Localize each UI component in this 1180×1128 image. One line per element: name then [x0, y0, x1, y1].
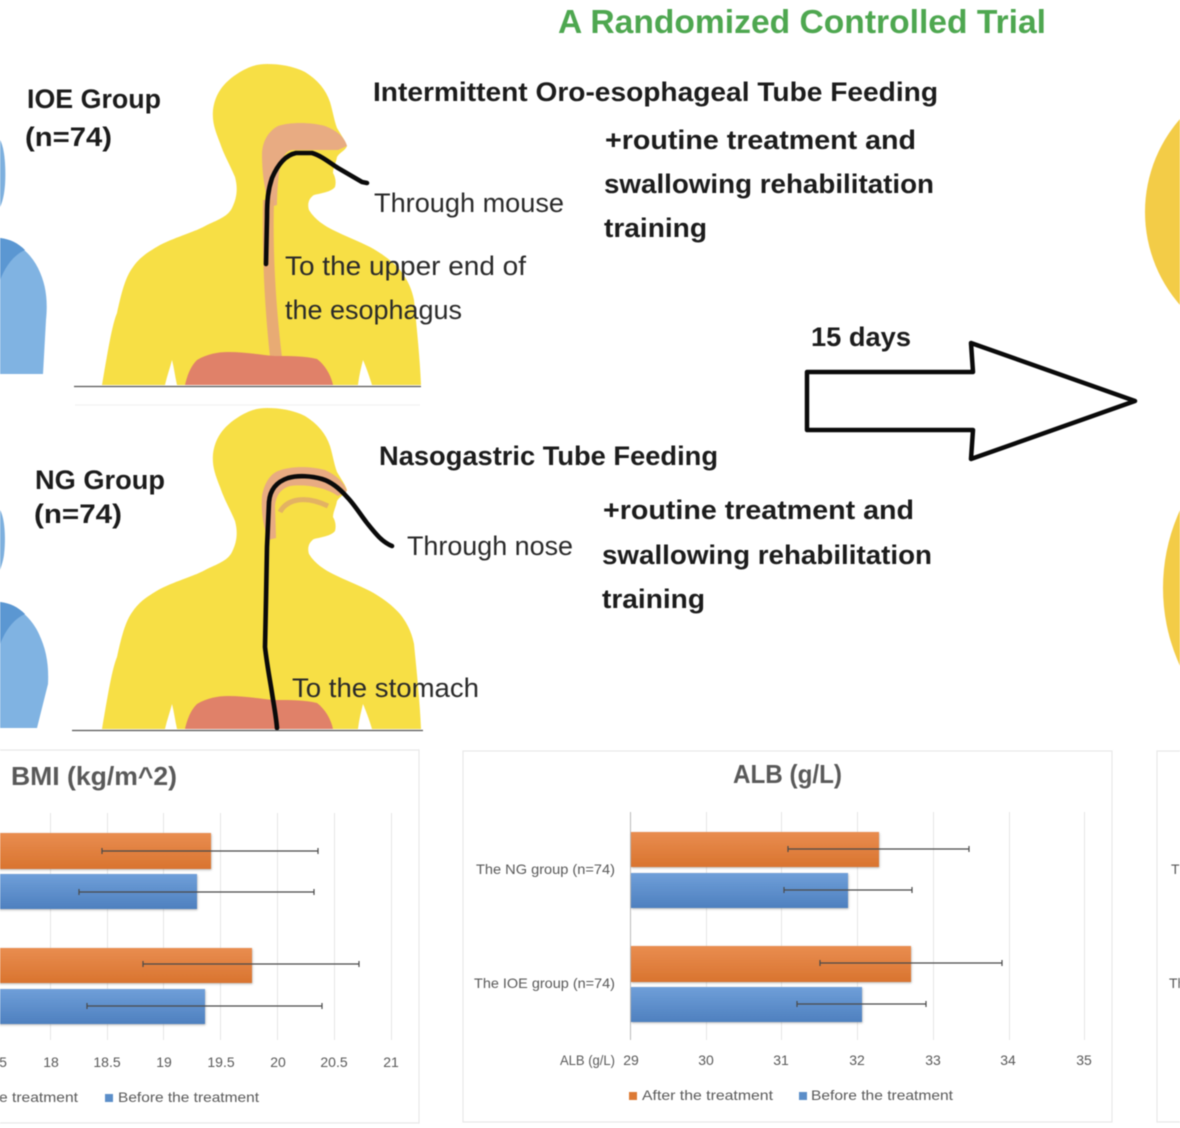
arrow label: 15 days	[811, 322, 911, 352]
category labels: ALB (g/L)	[560, 1052, 615, 1068]
esophagus	[263, 200, 282, 357]
arrow: 15 days	[807, 343, 1135, 459]
text block: IOE tube route: To the upper end of	[285, 251, 527, 281]
text block: IOE intervention: +routine treatment and	[605, 125, 916, 155]
body silhouette	[102, 64, 421, 385]
heading: IOE group: IOE Group	[27, 84, 161, 114]
gridlines	[630, 812, 1084, 1040]
heading: IOE group	[25, 84, 161, 152]
icon: blue patient silhouette IOE group	[0, 140, 47, 374]
chart frame	[1157, 751, 1180, 1122]
panel: BMI chart	[0, 750, 419, 1123]
panel: NG anatomy figure	[72, 408, 423, 730]
text block: IOE tube route	[285, 188, 564, 325]
stomach	[185, 696, 333, 729]
chart frame	[463, 751, 1112, 1122]
axis labels: 19.5	[207, 1054, 235, 1070]
stomach	[185, 352, 333, 385]
heading: IOE group: (n=74)	[25, 122, 112, 152]
text block: IOE intervention	[373, 77, 938, 243]
error bars	[784, 846, 1002, 1007]
legend: Before the treatment	[118, 1089, 259, 1105]
heading: NG group: NG Group	[35, 465, 165, 495]
baseline	[74, 386, 421, 388]
panel: IOE anatomy figure	[74, 64, 421, 386]
axis labels: 35	[1076, 1052, 1092, 1068]
text block: IOE intervention: swallowing rehabilitation	[604, 169, 934, 199]
legend	[629, 1087, 953, 1103]
bars	[0, 833, 252, 1024]
icon: yellow head upper right	[1145, 71, 1180, 353]
title: A Randomized Controlled Trial	[558, 3, 1046, 40]
nasal cavity	[262, 123, 347, 207]
axis labels: 34	[1000, 1052, 1016, 1068]
text block: IOE intervention: Intermittent Oro-esophageal Tube Feeding	[373, 77, 938, 107]
legend	[0, 1089, 259, 1105]
legend: e treatment	[0, 1089, 78, 1105]
text block: NG intervention	[379, 441, 932, 614]
category labels: The IOE group (n=74)	[474, 975, 615, 991]
category labels: T	[1171, 861, 1180, 877]
icon: blue patient silhouette NG group	[0, 510, 48, 728]
gridlines	[50, 813, 392, 1040]
axis labels: 31	[773, 1052, 789, 1068]
chart frame	[0, 750, 419, 1123]
text block: NG intervention: +routine treatment and	[603, 495, 914, 525]
text block: NG tube route: Through nose	[407, 531, 573, 561]
axis labels: 19	[156, 1054, 172, 1070]
axis labels: 32	[849, 1052, 865, 1068]
palate	[280, 500, 328, 512]
body silhouette	[102, 408, 421, 729]
axis labels	[0, 1054, 399, 1070]
baseline	[72, 730, 423, 732]
legend: After the treatment	[642, 1087, 773, 1103]
category labels	[1169, 861, 1180, 991]
axis labels: 18.5	[93, 1054, 121, 1070]
feeding tube	[265, 476, 392, 728]
nasal cavity	[262, 467, 347, 540]
axis labels: 33	[925, 1052, 941, 1068]
icon: yellow head lower right	[1163, 401, 1180, 775]
axis labels	[623, 1052, 1092, 1068]
feeding tube	[266, 153, 367, 264]
error bars	[79, 848, 359, 1009]
axis labels: 18	[43, 1054, 59, 1070]
panel: cropped third chart	[1157, 751, 1180, 1122]
axis labels: 30	[698, 1052, 714, 1068]
text block: IOE tube route: the esophagus	[285, 295, 462, 325]
category labels	[474, 861, 615, 1068]
text block: NG tube route: To the stomach	[292, 673, 479, 703]
bars	[631, 832, 911, 1022]
chart title: ALB (g/L)	[733, 759, 842, 789]
category labels: The NG group (n=74)	[476, 861, 615, 877]
text block: NG intervention: Nasogastric Tube Feeding	[379, 441, 718, 471]
text block: NG tube route	[292, 531, 573, 703]
axis labels: 20.5	[320, 1054, 348, 1070]
text block: NG intervention: training	[602, 584, 705, 614]
chart title: BMI (kg/m^2)	[11, 761, 177, 791]
axis labels: 20	[270, 1054, 286, 1070]
heading: NG group: (n=74)	[34, 499, 122, 529]
axis labels: 21	[383, 1054, 399, 1070]
text block: IOE intervention: training	[604, 213, 707, 243]
heading: NG group	[34, 465, 165, 529]
axis labels: 29	[623, 1052, 639, 1068]
panel: ALB chart	[463, 751, 1112, 1122]
text block: IOE tube route: Through mouse	[374, 188, 564, 218]
text block: NG intervention: swallowing rehabilitation	[602, 540, 932, 570]
legend: Before the treatment	[811, 1087, 953, 1103]
